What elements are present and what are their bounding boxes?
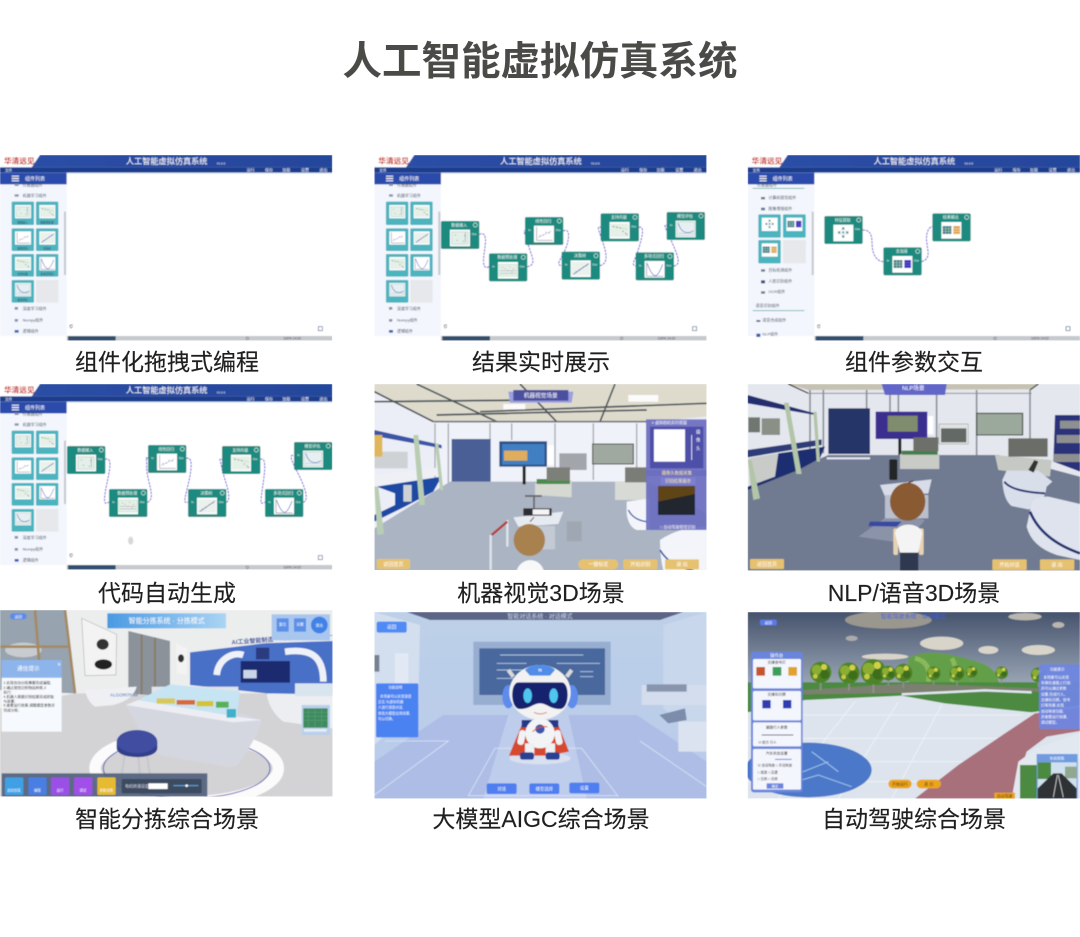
caption: 自动驾驶综合场景: 自动驾驶综合场景 <box>822 806 1006 832</box>
panel: drag-and-drop programming screenshot: 机器学习组件 <box>23 192 47 198</box>
bottom buttons <box>487 783 599 794</box>
clouds <box>845 611 1064 660</box>
gold buttons: 退 出 <box>1051 561 1063 568</box>
caption: 代码自动生成: 代码自动生成 <box>98 580 236 606</box>
right info popup: 并可以通过参数 <box>1041 686 1067 691</box>
blue exhibition wall: AI工业智能制造 <box>231 635 274 646</box>
title: 人工智能虚拟仿真系统 <box>342 40 738 84</box>
panel: drag-and-drop programming screenshot: 决策树 <box>43 246 51 250</box>
panel: real-time results screenshot: 深度学习组件 <box>397 305 421 311</box>
title: 智能对话系统 · 对话模式 <box>507 612 573 620</box>
workflow nodes: Out <box>179 456 184 460</box>
panel: drag-and-drop programming screenshot: 线性回归 <box>17 246 28 250</box>
panel: automatic code generation screenshot: 运行 <box>247 396 255 402</box>
hill <box>908 653 1000 685</box>
posters <box>82 618 187 676</box>
caption: 智能分拣综合场景: 智能分拣综合场景 <box>75 806 259 832</box>
caption: 组件参数交互: 组件参数交互 <box>845 349 983 375</box>
workflow nodes <box>67 442 332 517</box>
panel: component parameter interaction screenshot: 100% 14:02 <box>1031 337 1049 341</box>
panel: large-model AIGC scene <box>374 612 707 799</box>
camera panel: 识别结果展示 <box>665 477 692 484</box>
panel: drag-and-drop programming screenshot <box>0 155 332 341</box>
panel: automatic code generation screenshot: 深度学习组件 <box>23 534 47 540</box>
panel: drag-and-drop programming screenshot: 加载 <box>282 167 290 173</box>
info popup: 与放置; <box>3 698 15 703</box>
panel: drag-and-drop programming screenshot: 文件 <box>5 168 13 173</box>
panel: real-time results screenshot: 传感器组件 <box>397 181 417 187</box>
panel: component parameter interaction screenshot: 语音合成组件 <box>762 317 786 323</box>
robot mascot <box>502 665 578 764</box>
gold buttons: 返回首页 <box>383 561 403 568</box>
panel: real-time results screenshot: 组件列表 <box>399 175 419 182</box>
right info popup <box>1039 664 1080 729</box>
workflow nodes: 支持向量 <box>232 446 248 452</box>
right info popup: 调试模型。 <box>1041 720 1059 725</box>
panel: real-time results screenshot <box>374 155 707 341</box>
camera preview <box>302 705 330 735</box>
top-right controls: 复位 <box>279 622 287 627</box>
workflow nodes: Out <box>472 232 477 236</box>
panel: component parameter interaction screenshot: 退出 <box>1067 167 1075 173</box>
workflow nodes: In <box>492 264 495 268</box>
panel: autonomous driving scene <box>745 611 1080 799</box>
workflow nodes: Out <box>520 264 525 268</box>
panel: drag-and-drop programming screenshot: 模型评估 <box>17 298 28 302</box>
panel: component parameter interaction screenshot: 组件列表 <box>773 175 793 182</box>
panel: real-time results screenshot: 退出 <box>694 167 702 173</box>
workflow nodes: In <box>528 228 531 232</box>
back button: 返回 <box>765 620 772 625</box>
gold buttons <box>377 559 699 569</box>
bottom toolbar: 调试 <box>80 788 87 793</box>
workflow nodes: In <box>268 500 271 504</box>
gold buttons: 返回首页 <box>757 561 777 568</box>
workflow nodes: In <box>191 500 194 504</box>
info panel: 人进行语音对话, <box>378 705 403 710</box>
panel: real-time results screenshot: 华清远见 <box>378 156 409 166</box>
panel: drag-and-drop programming screenshot: 华清远见 <box>4 156 35 166</box>
caption: NLP/语音3D场景: NLP/语音3D场景 <box>828 580 1000 606</box>
workflow nodes: In <box>639 263 642 267</box>
left control panel: □ 左转 □ 右转 <box>758 776 778 781</box>
info popup: 完成分拣; <box>3 707 19 712</box>
caption: 机器视觉3D场景: 机器视觉3D场景 <box>457 580 625 606</box>
sorting table <box>126 684 262 767</box>
top-right controls: 设置 <box>296 622 304 627</box>
panel: automatic code generation screenshot: 人工智能虚拟仿真系统 <box>126 385 207 395</box>
side cabinets <box>374 653 707 752</box>
caption: 组件化拖拽式编程: 组件化拖拽式编程 <box>75 349 259 375</box>
info popup: 2.通过视觉识别物品种类,3 <box>3 685 46 690</box>
left control panel: 交通信号灯 <box>768 660 786 665</box>
back button: 返回 <box>387 624 397 631</box>
panel: automatic code generation screenshot: 逻辑组件 <box>23 557 39 563</box>
panel: drag-and-drop programming screenshot: 深度学习组件 <box>23 305 47 311</box>
workflow nodes: Out <box>592 263 597 267</box>
panel: drag-and-drop programming screenshot: 支持向量 <box>17 272 28 276</box>
info popup: × <box>57 663 61 669</box>
bottom toolbar: 参数设置 <box>100 788 114 793</box>
camera panel: × 虚拟相机实时视窗 <box>652 419 687 425</box>
map preview: 车前视角 <box>1050 755 1065 760</box>
workflow nodes: 数据预处理 <box>497 254 517 260</box>
banner: NLP场景 <box>902 384 925 392</box>
stool <box>117 730 157 777</box>
bottom toolbar <box>2 773 207 797</box>
wall display <box>876 412 927 455</box>
workflow nodes: 数据输入 <box>451 221 467 227</box>
right info popup: 功能提示 <box>1050 667 1065 672</box>
panel: automatic code generation screenshot <box>0 384 332 570</box>
robot mascot: π <box>538 668 542 674</box>
gold buttons: 开始对话 <box>999 561 1019 568</box>
panel: component parameter interaction screenshot: 保存 <box>1013 167 1021 173</box>
panel: real-time results screenshot: 运行 <box>621 167 629 173</box>
gold buttons: 开始识别 <box>630 561 650 568</box>
panel: drag-and-drop programming screenshot: 退出 <box>319 167 327 173</box>
workflow nodes: 线性回归 <box>535 217 551 223</box>
workflow nodes: Out <box>219 500 224 504</box>
panel: automatic code generation screenshot: 华清远见 <box>4 385 35 395</box>
panel: automatic code generation screenshot: 文件 <box>5 397 13 402</box>
right info popup: 交通标识牌、信号 <box>1041 697 1071 702</box>
workflow nodes: Out <box>140 500 145 504</box>
panel: drag-and-drop programming screenshot: 人工智能虚拟仿真系统 <box>126 156 207 166</box>
left control panel: 操作台 <box>770 652 783 659</box>
panel: component parameter interaction screenshot: NLP组件 <box>762 331 778 337</box>
side tables: ALGORITHM <box>110 693 138 698</box>
bottom toolbar: 电机转速设定 <box>125 783 149 789</box>
plaza <box>748 696 1080 799</box>
info panel: 体验大模型应用效果, <box>378 710 410 715</box>
floor markings <box>374 741 707 797</box>
top banner <box>107 613 226 628</box>
orange buttons: 开始运行 <box>892 781 908 787</box>
wall display <box>499 441 547 484</box>
right info popup: 自动驾驶功能, <box>1041 708 1064 713</box>
back wall door and windows <box>827 408 1023 459</box>
panel: component parameter interaction screenshot: 设置 <box>1049 167 1057 173</box>
workflow nodes: 特征提取 <box>835 216 851 222</box>
left shelving <box>374 430 443 535</box>
character <box>890 481 925 571</box>
panel: intelligent sorting scene <box>0 610 333 802</box>
info panel: 可以切换。 <box>378 716 395 721</box>
blue exhibition wall <box>190 635 333 694</box>
equipment tables <box>900 415 1080 477</box>
info popup: 执行; <box>3 690 12 695</box>
workflow nodes: In <box>887 258 890 262</box>
panel: component parameter interaction screenshot: 图像增强组件 <box>768 205 792 211</box>
info popup: 5.查看运行效果,调整模型参数并 <box>3 703 55 708</box>
back button <box>10 613 27 619</box>
connectors <box>479 225 678 267</box>
back button <box>760 620 777 625</box>
panel: automatic code generation screenshot: 100% 14:02 <box>283 566 301 570</box>
connectors <box>105 455 306 503</box>
windows <box>0 610 170 697</box>
workflow nodes: 多项式回归 <box>644 253 664 259</box>
camera panel: 像 <box>696 437 701 443</box>
panel: component parameter interaction screenshot: 传感器组件 <box>757 181 777 187</box>
panel: real-time results screenshot: 人工智能虚拟仿真系统 <box>500 156 582 166</box>
bottom toolbar: 运行 <box>57 788 64 793</box>
panel: automatic code generation screenshot: 组件列表 <box>25 404 45 411</box>
bottom toolbar: 启动仿真 <box>7 788 21 793</box>
panel: real-time results screenshot: 保存 <box>639 167 647 173</box>
panel: drag-and-drop programming screenshot: 传感器组件 <box>23 181 43 187</box>
panel: drag-and-drop programming screenshot: 多项式回归 <box>40 272 54 276</box>
workflow nodes: 线性回归 <box>158 445 174 451</box>
workflow nodes: Out <box>556 228 561 232</box>
equipment tables <box>535 467 707 571</box>
workflow nodes <box>441 212 705 281</box>
pink path <box>915 708 1080 799</box>
map preview <box>1037 754 1078 799</box>
title: 智能驾驶系统 · 体验模式 <box>881 612 946 620</box>
workflow nodes: Out <box>855 227 860 231</box>
workflow nodes: 决策树 <box>200 489 212 495</box>
info panel: 功能说明 <box>388 684 403 689</box>
workflow nodes: 支持向量 <box>611 214 627 220</box>
info popup: 通信提示 <box>17 665 40 673</box>
panel: automatic code generation screenshot: 加载 <box>282 396 290 402</box>
connectors <box>863 227 932 262</box>
workflow nodes: 数据预处理 <box>117 489 137 495</box>
right info popup: 设置,完成行人、 <box>1041 691 1068 696</box>
character <box>514 517 545 571</box>
panel: automatic code generation screenshot: 机器学习组件 <box>23 421 47 427</box>
panel: drag-and-drop programming screenshot: 逻辑组件 <box>23 328 39 334</box>
panel: drag-and-drop programming screenshot: 100% 14:02 <box>283 337 301 341</box>
workflow nodes: 模型评估 <box>677 212 693 218</box>
bottom buttons: 对话 <box>497 785 507 792</box>
panel: drag-and-drop programming screenshot: V1.0.0 <box>217 162 226 166</box>
panel: drag-and-drop programming screenshot: 设置 <box>301 167 309 173</box>
panel: real-time results screenshot: Numpy组件 <box>397 317 418 323</box>
camera panel: 摄像头数据采集 <box>662 469 693 476</box>
orange buttons: 退 出 <box>924 781 933 787</box>
banner <box>508 390 573 403</box>
camera panel <box>646 419 707 530</box>
orange buttons <box>888 780 1015 799</box>
panel: component parameter interaction screenshot: 语音识别组件 <box>756 302 780 308</box>
panel: real-time results screenshot: 文件 <box>379 168 387 173</box>
caption: 结果实时展示: 结果实时展示 <box>472 349 610 375</box>
info popup: 4.机器人根据识别结果完成抓取 <box>3 694 54 699</box>
back button: 返回 <box>15 614 22 619</box>
bottom buttons: 模型选择 <box>536 785 554 792</box>
wall screen <box>473 642 611 705</box>
panel: real-time results screenshot: V1.0.0 <box>591 162 600 166</box>
left control panel: ☑ 自动驾驶 □ 手动驾驶 <box>758 763 793 768</box>
panel: NLP voice 3D scene <box>748 384 1080 571</box>
panel: component parameter interaction screenshot: 文件 <box>753 168 760 173</box>
workflow nodes: 全连接 <box>896 248 908 254</box>
panel: real-time results screenshot: 加载 <box>657 167 665 173</box>
panel: real-time results screenshot: 逻辑组件 <box>397 328 413 334</box>
left control panel: □ 前进 □ 后退 <box>758 769 778 774</box>
panel: automatic code generation screenshot: Numpy组件 <box>23 546 43 552</box>
right info popup: 车辆在道路上行驶, <box>1041 680 1071 685</box>
workflow nodes: 数据输入 <box>77 446 93 452</box>
right workbenches <box>1002 460 1080 560</box>
bottom toolbar: 编程 <box>34 788 41 793</box>
gold buttons: 退 出 <box>676 561 688 568</box>
right info popup: 灯等场景,实现 <box>1041 703 1064 708</box>
panel: drag-and-drop programming screenshot: 数据输入 <box>17 220 28 224</box>
panel: drag-and-drop programming screenshot: 组件列表 <box>25 175 45 182</box>
panel: automatic code generation screenshot: 退出 <box>319 396 327 402</box>
panel: drag-and-drop programming screenshot: 数据预处理 <box>40 220 54 224</box>
left control panel <box>751 652 803 792</box>
workflow nodes: Out <box>631 224 636 228</box>
workflow nodes <box>824 213 971 275</box>
workflow nodes: Out <box>666 263 671 267</box>
top banner: 智能分拣系统 · 分拣模式 <box>129 616 205 625</box>
panel: component parameter interaction screenshot <box>748 155 1080 341</box>
info popup: 1.实现自动分拣需要完成编程, <box>3 680 51 685</box>
info panel: 交互,与虚拟机器 <box>378 699 404 704</box>
panel: component parameter interaction screenshot: V1.0.0 <box>964 162 973 166</box>
left control panel: 交通标识牌 <box>768 692 786 697</box>
panel: drag-and-drop programming screenshot: Numpy组件 <box>23 317 43 323</box>
panel: real-time results screenshot: 机器学习组件 <box>397 192 421 198</box>
camera panel: 摄 <box>696 428 701 435</box>
top-right controls <box>272 614 330 640</box>
panel: component parameter interaction screenshot: 计算机视觉组件 <box>768 194 796 200</box>
gold buttons: 一键标定 <box>588 561 608 568</box>
workflow nodes: Out <box>296 500 301 504</box>
left shelving <box>748 395 825 500</box>
panel: automatic code generation screenshot: 保存 <box>265 396 273 402</box>
workflow nodes: Out <box>253 457 258 461</box>
panel: component parameter interaction screenshot: 人脸识别组件 <box>768 277 792 283</box>
workflow nodes: In <box>151 456 154 460</box>
gold buttons <box>750 559 1074 570</box>
stanchion <box>491 520 507 570</box>
workflow nodes: Out <box>98 457 103 461</box>
center table with smart speaker <box>880 459 932 518</box>
left control panel: 道路行人参数 <box>766 724 788 729</box>
top-right controls: 退出 <box>316 622 323 627</box>
workflow nodes: 模型评估 <box>304 442 320 448</box>
workbench <box>513 496 582 549</box>
workflow nodes: In <box>670 223 673 227</box>
workflow nodes: In <box>565 263 568 267</box>
back button <box>377 622 407 633</box>
info popup <box>2 660 62 732</box>
panel: machine vision 3D scene <box>374 384 707 571</box>
trees <box>810 659 1046 693</box>
bottom buttons: 设置 <box>580 785 589 792</box>
info panel <box>376 683 418 737</box>
workflow nodes: 决策树 <box>574 252 586 258</box>
banner <box>882 384 947 395</box>
left control panel: 汽车状态设置 <box>766 750 788 755</box>
water pool <box>745 743 872 797</box>
panel: component parameter interaction screenshot: 华清远见 <box>752 156 783 166</box>
banner: 机器视觉场景 <box>524 391 558 399</box>
workflow nodes: In <box>297 453 300 457</box>
camera panel: 头 <box>696 445 701 452</box>
panel: component parameter interaction screenshot: 人工智能虚拟仿真系统 <box>874 156 955 166</box>
panel: automatic code generation screenshot: 设置 <box>301 396 309 402</box>
panel: drag-and-drop programming screenshot: 运行 <box>247 167 255 173</box>
workflow nodes: 多项式回归 <box>273 489 293 495</box>
panel: component parameter interaction screenshot: 加载 <box>1030 167 1038 173</box>
panel: component parameter interaction screenshot: 目标检测组件 <box>768 266 792 272</box>
panel: drag-and-drop programming screenshot: 保存 <box>265 167 273 173</box>
orange buttons: 自动驾驶 <box>997 792 1013 798</box>
panel: component parameter interaction screenshot: 运行 <box>994 167 1002 173</box>
workflow nodes: In <box>112 500 115 504</box>
left control panel: ☑ 前方 行人 <box>758 740 777 745</box>
info panel: 本场景可以实现语音 <box>380 693 412 698</box>
panel: automatic code generation screenshot: V1.0.0 <box>217 391 226 395</box>
right info popup: 本场景可以实现 <box>1043 674 1069 679</box>
camera panel: □ 自动驾驶视觉识别 <box>660 524 695 530</box>
panel: real-time results screenshot: 100% 14:02 <box>658 337 676 341</box>
workflow nodes: 结果输出 <box>943 214 959 220</box>
right info popup: 并查看运行效果, <box>1041 714 1068 719</box>
left control panel: 确定 <box>772 784 779 789</box>
panel: real-time results screenshot: 设置 <box>675 167 683 173</box>
panel: automatic code generation screenshot: 传感器组件 <box>23 410 43 416</box>
caption: 大模型AIGC综合场景: 大模型AIGC综合场景 <box>432 806 650 832</box>
side tables <box>85 683 333 728</box>
workflow nodes: Out <box>914 258 919 262</box>
panel: component parameter interaction screenshot: OCR组件 <box>768 288 785 294</box>
